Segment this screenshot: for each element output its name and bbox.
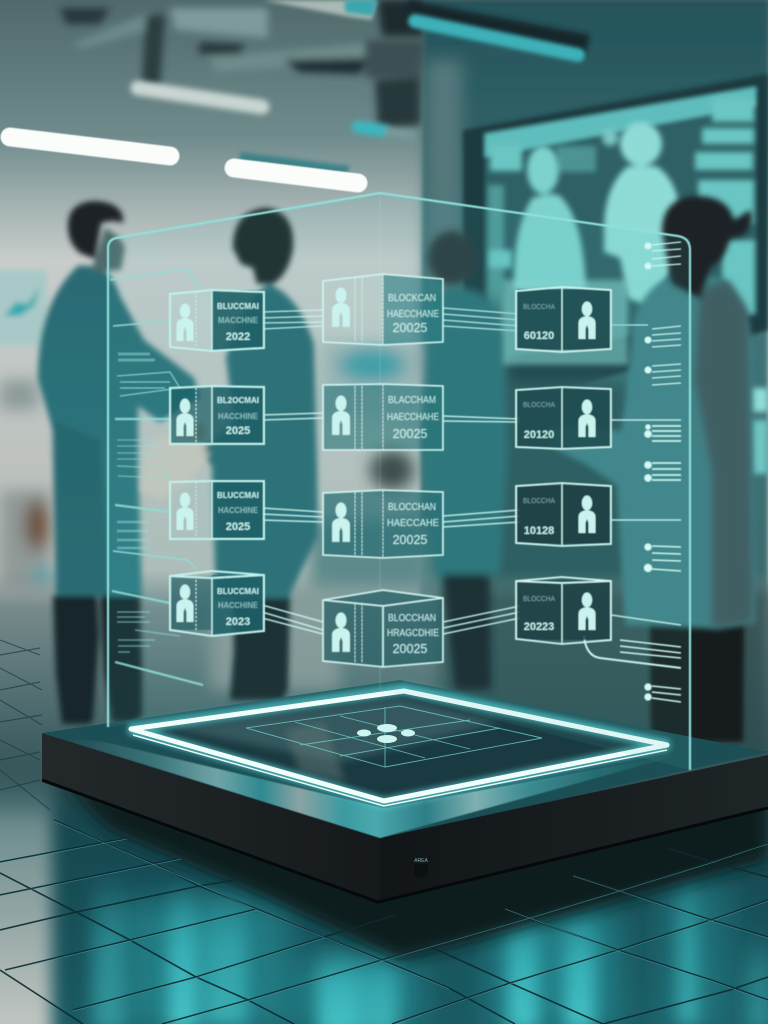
block: right row 4: BLOCCHA	[523, 596, 555, 603]
person: centre left	[140, 208, 318, 700]
ceiling lamp: teal small	[358, 127, 415, 136]
background: right edge screen glow	[745, 388, 768, 474]
tray circuit diagram	[246, 706, 542, 767]
block: middle row 3: HAECCAHE	[387, 517, 439, 529]
right side annotation list 7	[584, 636, 681, 668]
block: left row 1: BLUCCMAI	[217, 301, 259, 311]
block: right row 1	[516, 287, 611, 352]
panel glass tint	[107, 193, 690, 770]
screen data columns	[488, 98, 755, 335]
block: left row 4: 2023	[226, 616, 250, 628]
ceiling lamp: bright left	[10, 137, 170, 156]
background blur: lab machinery	[0, 300, 630, 690]
floor reflections: teal bars	[92, 865, 768, 1024]
right side annotation list 6	[644, 544, 681, 572]
block: middle row 4: 20025	[393, 642, 427, 656]
floor far	[0, 570, 768, 850]
block: middle row 4: HRAGCDHIE	[387, 627, 439, 639]
floor far tile lines	[0, 640, 50, 810]
ceiling lamp: dim upper	[138, 88, 262, 107]
tray centre nodes	[357, 724, 415, 743]
floor tile grid light edge	[0, 821, 768, 1024]
base: embossed logo: AREA	[414, 858, 428, 864]
connector lines: row 2	[262, 413, 681, 422]
glass holographic panel	[107, 193, 690, 770]
floor reflections: teal wide glow	[120, 880, 730, 1024]
base: top surface	[42, 680, 768, 838]
block: left row 2: HACCHINE	[218, 412, 259, 421]
person: far left	[38, 201, 200, 724]
glowing frame	[131, 691, 667, 801]
block: right row 3: BLOCCHA	[523, 498, 555, 505]
block: left row 4: HACCHINE	[218, 601, 259, 610]
block: left row 3: 2025	[226, 521, 250, 533]
background: ceiling beams	[60, 0, 425, 128]
base: right side	[380, 755, 768, 902]
block: left row 4	[170, 571, 264, 636]
frame front groove	[133, 735, 667, 806]
screen glow behind right row 1	[503, 280, 628, 365]
block: middle row 1: HAECCHANE	[387, 308, 439, 320]
connector lines: row 3	[262, 508, 681, 527]
floor far right darkening	[440, 590, 768, 760]
person: far centre	[422, 231, 508, 690]
block: left row 3	[170, 481, 264, 540]
background wall screen	[463, 74, 768, 420]
connector lines: row 1	[262, 308, 648, 331]
block: right row 1: 60120	[524, 330, 554, 342]
block: right row 1: BLOCCHA	[523, 304, 555, 311]
right side annotation list 4	[645, 425, 681, 441]
block: middle row 3	[323, 490, 443, 558]
ceiling lamp: teal upper	[262, 0, 590, 55]
block: middle row 4	[323, 590, 443, 667]
floor near	[0, 780, 768, 1024]
glowing frame outer	[129, 689, 669, 803]
base: left side	[42, 733, 380, 902]
left side annotation lines	[110, 250, 203, 685]
block: middle row 1: BLOCKCAN	[388, 292, 436, 304]
panel outline	[108, 193, 690, 770]
right side annotation list 8	[645, 684, 681, 702]
screen figure: left	[514, 146, 586, 290]
right side annotation list 5	[645, 462, 681, 481]
block: left row 4: BLUCCMAI	[217, 586, 259, 596]
block: left row 2	[170, 386, 264, 444]
platform base	[42, 680, 768, 902]
block: left row 1	[170, 290, 264, 351]
block: middle row 1	[323, 274, 443, 345]
background: right wall pillar edge	[426, 60, 462, 400]
base: embossed logo	[414, 858, 428, 878]
right side annotation list 3	[645, 364, 681, 385]
base: tray	[129, 689, 669, 803]
block: left row 1: 2022	[226, 331, 250, 343]
block: right row 2: BLOCCHA	[523, 402, 555, 409]
block: left row 2: BL2OCMAI	[217, 395, 259, 405]
block: right row 2: 20120	[524, 429, 554, 441]
block: left row 3: BLUCCMAI	[217, 490, 259, 500]
block: right row 3	[516, 483, 611, 546]
base: frosted band reflection	[60, 738, 690, 838]
block: middle row 3: BLOCCHAN	[388, 501, 436, 513]
block: right row 3: 10128	[524, 525, 554, 537]
screen figure: right	[602, 122, 682, 308]
right side annotation list 1	[645, 242, 681, 269]
block: right row 2	[516, 387, 611, 449]
block: left row 3: HACCHINE	[218, 506, 259, 515]
floor far reflection	[210, 600, 340, 690]
block: left row 2: 2025	[226, 425, 250, 437]
panel centre fold	[379, 193, 381, 690]
block: right row 4: 20223	[524, 621, 554, 633]
base: tray sheen	[170, 698, 500, 762]
block: middle row 4: BLOCCHAN	[388, 612, 436, 624]
block: middle row 2: HAECCHAHE	[387, 411, 439, 423]
block: left row 1: MACCHNE	[218, 316, 259, 325]
person: right	[547, 196, 755, 742]
block: middle row 3: 20025	[393, 533, 427, 547]
floor: base shadow	[60, 780, 768, 960]
block: middle row 2: BLACCHAM	[388, 394, 436, 406]
floor tile grid dark	[0, 820, 768, 1024]
block: right row 4	[516, 577, 611, 644]
block: middle row 2: 20025	[393, 427, 427, 441]
background: back wall	[0, 0, 768, 620]
block: middle row 1: 20025	[393, 321, 427, 335]
ceiling lamp: centre	[234, 152, 358, 183]
background: right wall	[420, 0, 768, 640]
floor reflection: grey wall	[0, 770, 52, 1024]
background: left wall art	[0, 270, 47, 346]
connector lines: row 4	[262, 605, 681, 634]
right side annotation list 2	[645, 326, 681, 347]
block: middle row 2	[323, 384, 443, 450]
base: bottom shadow line	[42, 780, 768, 902]
